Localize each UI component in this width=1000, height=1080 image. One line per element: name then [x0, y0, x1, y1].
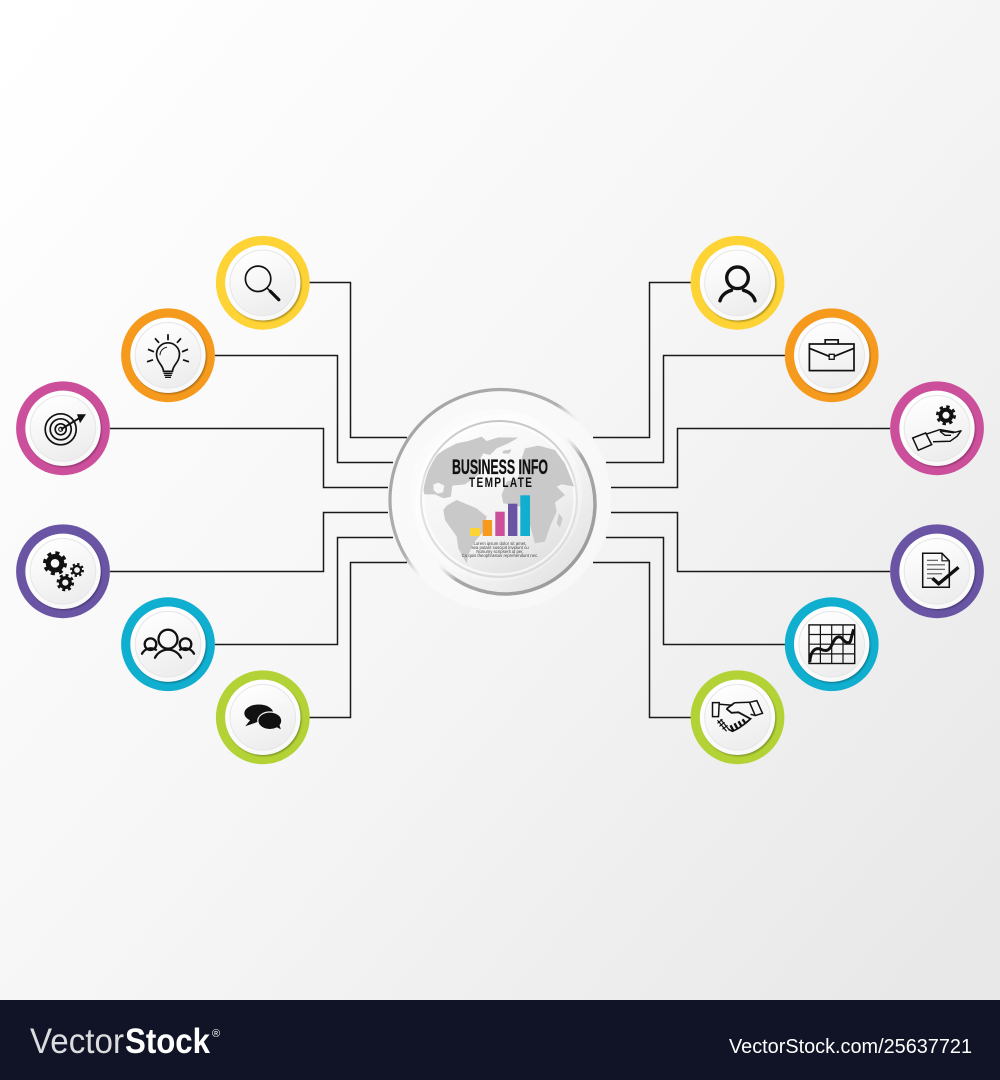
footer logo — [30, 1022, 220, 1061]
node: hand with gear (pink) — [890, 381, 984, 475]
node: briefcase (orange) — [785, 308, 879, 402]
node: team (blue) — [121, 597, 215, 691]
subtitle text: TEMPLATE — [469, 474, 532, 490]
central hub — [388, 388, 597, 596]
node: idea (orange) — [121, 308, 215, 402]
node: target (pink) — [16, 381, 110, 475]
node: document (purple) — [890, 524, 984, 618]
icon: hand holding gear — [913, 407, 961, 450]
node: person (yellow) — [691, 236, 784, 330]
icon: magnifying glass — [245, 266, 279, 300]
icon: briefcase — [809, 340, 854, 371]
icon: gears — [44, 553, 83, 590]
world map — [420, 437, 574, 563]
footer logo: ® — [212, 1028, 220, 1040]
footer logo: Stock — [125, 1022, 210, 1061]
node: gears (purple) — [16, 524, 110, 618]
caption text: Nonumy scripserit id per. — [476, 549, 524, 554]
connector lines — [110, 282, 890, 718]
icon: light bulb — [147, 334, 189, 377]
footer bar — [0, 1000, 1000, 1080]
node: chat (green) — [216, 670, 310, 764]
node: search (yellow) — [216, 236, 310, 330]
node: line chart (blue) — [785, 597, 879, 691]
bar chart — [470, 495, 530, 536]
caption text: Lorem ipsum dolor sit amet, — [473, 541, 527, 546]
caption text — [462, 541, 538, 558]
footer image id: VectorStock.com/25637721 — [729, 1036, 972, 1058]
caption text: Cu quis theophrastus reprehendunt nec. — [462, 553, 538, 558]
caption text: sea putant suscipit invidunt cu — [471, 545, 529, 550]
icon: handshake — [712, 701, 762, 731]
footer logo: Vector — [30, 1022, 124, 1061]
icon: document with check — [923, 553, 958, 587]
icon: speech bubbles — [244, 704, 282, 730]
icon: line chart grid — [809, 625, 855, 664]
node: handshake (green) — [691, 670, 784, 764]
icon: target with arrow — [45, 414, 86, 445]
title text: BUSINESS INFO — [452, 456, 548, 479]
icon: group of people — [142, 630, 194, 658]
icon: user — [720, 267, 755, 301]
